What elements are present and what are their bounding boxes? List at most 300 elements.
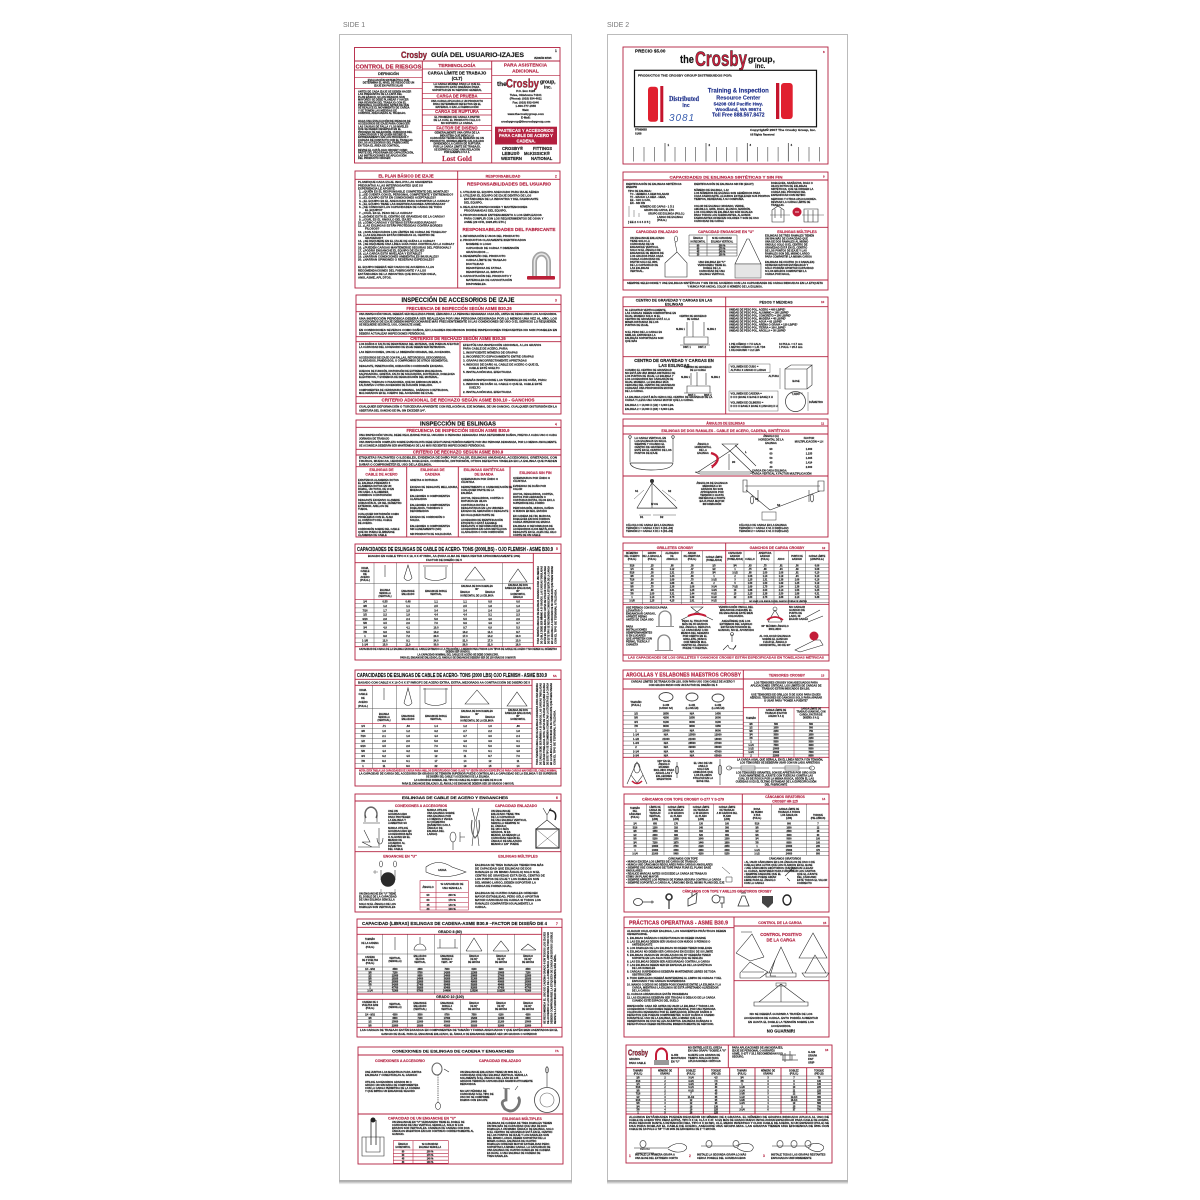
text: para aplicaciones: SEGURO. <box>732 1054 744 1058</box>
table: grilletes: 1.00 <box>650 594 655 596</box>
table: grapas: 360 <box>817 1097 822 1099</box>
table: cancamos con tope: VERTICAL <box>649 815 661 818</box>
box: distribuidor <box>634 70 816 127</box>
table: angulo: ÁNGULO <box>422 884 434 889</box>
footer note: SIEMPRE SELECCIONE Y USE ESLINGAS SINTÉTICAS Y SIN FIN DE ACUERDO CON LAS CAPACIDADES DE CARGA INDICADAS EN LA ETIQUETA <box>627 280 823 285</box>
table: tensores: 1-3/4 <box>748 751 754 754</box>
table: tons: 7/8 <box>363 630 367 634</box>
section: conexiones a accesorios: ACCESORIOS MÁS <box>388 831 412 836</box>
heading: multiples: ESLINGAS MÚLTIPLES <box>777 229 817 234</box>
column: cable de acero: ESLINGAS DE <box>369 468 394 472</box>
column: control de riesgos: LAS PREGUNTAS DE LA LISTA DEL <box>358 92 403 96</box>
table: tons: 9/16 <box>362 617 368 621</box>
table: tons: 1.7 <box>383 608 387 612</box>
column: sin fin: HOYOS, DESGARROS, CORTES, <box>513 492 554 496</box>
table: tons: 3.4 <box>463 608 467 612</box>
version: VERSIÓN 8/7/05 <box>534 57 552 60</box>
text: numero de eslinga: TIEMPOS, REFIÉRASE A SU COMPAÑÍA. <box>694 196 744 201</box>
footer note: LAS CARGAS DE TRABAJO ESTÁN BASADAS EN COMPONENTES DE TAMAÑO Y FORMA ADECUADOS Y QUE ESTÉN BIEN ASENTADOS EN EL <box>360 1027 558 1032</box>
page number: 9 <box>823 174 825 178</box>
table: grado 8: 95400 <box>444 987 451 990</box>
list: fabricante: 4. CAPACITACIÓN DEL PRODUCTO Y <box>460 273 512 278</box>
section: capacidad enlazado: MENOR A 120° PUEDE <box>491 842 519 846</box>
checklist: plan basico: 19. ¿NARRAN CONDICIONES AMBIENTALES INUSUALES? <box>358 255 439 259</box>
table: tons 5A: 2.4 <box>516 734 520 738</box>
table: grado 10: DE 30° <box>524 1006 532 1008</box>
table: grapas: 3 <box>664 1097 666 1099</box>
text: criterios derecha: EFECTÚE UNA INSPECCIÓN ADICIONAL A LAS GRAPAS <box>463 342 541 347</box>
table: grilletes: 1.25 <box>690 590 695 592</box>
table: tons: 11.4 <box>488 630 493 634</box>
text: verificacion <box>718 604 754 632</box>
table: grapas: (PULG.) <box>687 1074 696 1076</box>
section: eslingas multiples: CARGA. <box>475 905 487 909</box>
text: pernos roscados: SEMIPERMANENTES <box>626 630 652 634</box>
table: grado 8: DE GRÚAS <box>495 961 508 964</box>
table: tons: ESLINGA DE DOS <box>508 584 528 587</box>
table: tons 5A: HORIZONTAL <box>511 718 526 721</box>
table: grapas: 12 <box>793 1094 796 1096</box>
table: grado 8: 4900 <box>498 968 504 971</box>
heading <box>634 358 714 368</box>
text: dobleces: SINTÉTICAS, QUE SE DIRIGEN LA <box>771 186 813 191</box>
text: centro de gravedad: MISMA DISTANCIA DE LOS <box>625 320 659 324</box>
heading: plan basico: EL PLAN BÁSICO DE IZAJE <box>378 173 434 178</box>
page number: 4 <box>555 422 557 426</box>
table: tons: 16.0 <box>515 643 521 647</box>
table: tons: 1/2 <box>363 613 367 617</box>
column: control de riesgos: PLAN BÁSICO. SI LOS RIESGOS SON <box>358 94 405 99</box>
text: angulo horizontal <box>695 441 712 455</box>
heading: CONEXIONES A ACCESORIO <box>375 1059 425 1063</box>
text: carga vertical: ESTÉ EN EL CENTRO DE LOS <box>634 447 672 452</box>
table: ganchos: NO USAR LOS ÁNGULOS DEL GANCHO FUERA DE LÍMITES <box>749 600 807 603</box>
table: tensores: 10000 <box>773 748 780 750</box>
heading: capacidad enlazado: CAPACIDAD ENLAZADO <box>636 230 678 234</box>
heading: GRILLETES CROSBY <box>657 546 694 550</box>
table: ganchos: 1.13 <box>763 576 768 578</box>
table: cancamos con tope: 310 <box>674 827 679 829</box>
list: fabricante: CARGA LÍMITE DE TRABAJO <box>466 257 507 262</box>
text: angulo: 90° MÁXIMO ÁNGULO <box>761 623 789 628</box>
column: control de riesgos: QUE SE DEBEN OBSERVAR EN EL <box>358 127 402 131</box>
text: enlazado: PARTIR SOLO EL 80% <box>630 260 658 264</box>
table: tons 5A: 3/8 <box>361 729 365 733</box>
table: ganchos: .94 <box>779 568 783 571</box>
table: tons 5A: 6.2 <box>382 754 386 758</box>
text: calculo derecha: TENSIÓN 1 = CARGA X S1 X D2/(D1+D2) <box>739 525 789 530</box>
table: angulo: 45 <box>402 1158 405 1160</box>
table: cancamos con tope: DE TRABAJO <box>669 809 684 812</box>
table: ganchos: 7-1/2 <box>732 586 738 588</box>
text: enlazado: REDUCIDAS. <box>460 1082 476 1086</box>
text: numero de eslinga: CADA FABRICANTE. ALGUNOS ESTABLECEN SUS PROPIOS <box>694 194 770 198</box>
table: argollas: 47000 <box>714 749 722 753</box>
table: tons 5A: 6.1 <box>463 744 467 748</box>
column: terminologia: POR LA CARGA LÍMITE DE TRABAJO. <box>433 144 481 148</box>
column: sin fin: CORTE DE UN CABLE <box>513 533 541 537</box>
text: practicas: 10. MANOS O DEDOS NO DEBEN POSICIONARSE ENTRE LA ESLINGA Y LA <box>627 982 721 986</box>
table: tons 5A: 1.2 <box>406 729 410 733</box>
column: cadena: SIN PRODUCTO DE SOLDADURA <box>410 532 452 536</box>
table: cancamos con tope: DE TRABAJO <box>720 809 735 812</box>
table: grilletes: (PULG.) <box>648 559 657 561</box>
table: grado 8: DE DOS <box>416 959 425 961</box>
logo: crosby: Crosby <box>628 1048 648 1058</box>
text: tensores nota: DEL FABRICANTE <box>765 782 788 786</box>
text: multiples: SOPORTAN LA MISMA CARGA. LA CAPACIDAD DE <box>487 1145 551 1149</box>
text: enganche U: VERDADERA TIENE EL <box>698 263 727 267</box>
column: control de riesgos: IZAJE EN PARTICULAR <box>374 83 403 87</box>
diagram: centro de gravedad: DE CARGA <box>687 318 699 321</box>
sidebar: nota: DE CABLE DEBE SER MÍNIMO A 30 GRADOS. LAS CARGAS TABULADAS <box>540 566 544 644</box>
text: pesos: UNIDAD DE PESO POL. ACERO = 490 LB/PIE³ <box>729 308 785 312</box>
table: argollas: (LLAVE EN) <box>712 707 725 710</box>
column: control de riesgos: PERSONAL CALIFICADO ANTES DE QUE <box>358 103 409 107</box>
table: tons 5A: 3.9 <box>516 744 520 748</box>
text: conexiones: Y QUE IMPIDA UN ENGANCHE SEGURO <box>365 1089 415 1093</box>
table: angulo: 30 <box>697 254 700 256</box>
table: grado 10: 8800 <box>525 1018 531 1020</box>
table: ganchos: .88 <box>763 569 767 571</box>
text: criterios izquierda: COMPONENTES DE CERRADURA ORIGINAL, DAÑADOS O RETIRADOS, <box>359 387 449 392</box>
checklist: plan basico: EXPERIENCIA LE APORTE <box>358 186 395 190</box>
table: grapas: 4 <box>767 1102 769 1105</box>
table: grapas: 7/8 <box>740 1081 744 1083</box>
icon: fist grip clip <box>780 1051 798 1062</box>
table: cancamos con tope: CARGA LÍMITE <box>719 806 736 809</box>
section: enganche en U: UN ENGANCHE EN "U" TIENE <box>359 892 396 896</box>
icon: basket hitch over load <box>735 239 761 278</box>
text: tensores: LOS TENSORES CROSBY SON ADECUADOS PARA <box>754 680 818 684</box>
decoration: red stripes <box>648 83 793 122</box>
text: g-429 <box>808 1050 817 1064</box>
text: carga tension <box>752 468 812 476</box>
callout: pastecas y accesorios: CADENA. <box>516 138 536 143</box>
title: GUÍA DEL USUARIO-IZAJES <box>431 50 525 59</box>
table: grilletes: 8-1/2 <box>711 597 717 599</box>
caption step 1 <box>629 1152 678 1160</box>
table: tons 5A: 1.6 <box>382 729 386 733</box>
text: criterio <box>359 454 557 466</box>
text: notas tope <box>626 858 725 884</box>
text: angulo: FIJAR EL ÁNGULO <box>763 639 787 644</box>
text: 120: MAESTROS <box>657 777 672 781</box>
table: grapas: 225 <box>714 1110 719 1112</box>
table: tons 5A: 8.3 <box>382 759 386 763</box>
footer note <box>359 648 557 660</box>
table: cancamos con tope: 130 <box>699 824 704 826</box>
column: para asistencia: P.O. Box 3128 <box>516 89 536 93</box>
text: criterios izquierda: ACCESORIOS DE IZAJE CON FALLAS, RETORCIDOS, DESCORRIDOS, <box>359 356 447 360</box>
table: cancamos con tope: (PULG.) <box>631 817 640 819</box>
table: tons: 30.0 <box>433 643 439 647</box>
table: grilletes: 7/8 <box>630 594 634 596</box>
table: tons: 2.4 <box>488 608 492 612</box>
column: control de riesgos: CAPACITADOR Y DE QUIEN RECIBE EL <box>358 132 407 136</box>
table: tons 5A: 12 <box>435 754 438 758</box>
table: angulo: ÁNGULO <box>693 237 703 240</box>
text: no se deben guarnir: NO GUARNIR! <box>767 1028 795 1034</box>
text: centro de gravedad: SIMILAR, ENTONCES LA <box>625 333 656 337</box>
text: enganche U: UNA ESLINGA EN "U" <box>698 260 726 264</box>
text: notas tope: ÁNGULARES <box>626 868 643 872</box>
text: criterio: DAÑAR O COMPROMETER EL USO DE LA ESLINGA. <box>359 462 432 466</box>
table: tons: 12.0 <box>382 638 388 642</box>
table: factor <box>758 433 823 469</box>
table: cancamos giratorios: CARGA LÍMITE DE <box>779 808 800 811</box>
icon: shackle with angle <box>681 607 713 620</box>
table: grapas: 19 <box>793 1103 796 1105</box>
text: tensores: AÉREOS. TENSORES DE GANCHOS SOLO PARA APARAR <box>750 694 822 700</box>
table: ganchos: 1.69 <box>779 583 784 585</box>
text: identificacion: (PULG.) <box>657 218 667 222</box>
column: terminologia: MATERIAL O EN LA FABRICACIÓN <box>435 104 479 109</box>
section: conexiones a accesorios: PARA PROTEGER <box>388 815 410 819</box>
table: cancamos con tope: 2120 <box>698 846 704 848</box>
table: tons: 0.55 <box>382 600 388 604</box>
text: training center: Training & Inspection <box>708 88 769 94</box>
table: tons: CABLE <box>361 569 370 573</box>
table: grado 8: 25600 <box>498 979 505 981</box>
panel 2: plan basico y responsabilidad <box>355 171 560 288</box>
icon: sling wear and stop sign <box>770 206 824 222</box>
section: eslingas multiples: ESLINGAS MÚLTIPLES <box>498 854 538 858</box>
table: grado 10: DE GRÚAS <box>495 1008 508 1011</box>
text: angulo horizontal: HORIZONTAL <box>695 445 712 449</box>
table: tensores: 500 <box>809 724 814 726</box>
table: grilletes: 1/2 <box>712 569 716 571</box>
text: criterios derecha: 2. INSTALACIÓN MAL EFECTUADA <box>463 389 512 394</box>
table: tons: 2.9 <box>516 617 520 621</box>
table: argollas: 2-3/4 <box>633 754 640 758</box>
table: cancamos con tope: 1200 <box>652 827 658 829</box>
table: cancamos giratorios: 3/8 <box>755 827 759 829</box>
table: grilletes: 1-1/2 <box>711 580 717 582</box>
column: terminologia: (CLT) <box>452 76 463 81</box>
table: tons: 60° <box>516 591 520 593</box>
table: grado 10: 12000 <box>417 1022 424 1024</box>
table: tons 5A: .71 <box>382 724 386 728</box>
page number: 3 <box>555 298 557 302</box>
logo: the crosby group inc: Crosby <box>695 48 747 71</box>
list: usuario: PARA CUMPLIR CON LOS REQUERIMIENTOS DE OSHA Y <box>464 216 544 220</box>
icon: coil with sling <box>373 861 396 892</box>
table: factor: ESLINGA <box>765 441 777 445</box>
list: usuario: ESTÁNDARES DE LA INDUSTRIA Y DEL FABRICANTE <box>464 196 538 201</box>
text: enganche U <box>698 260 727 276</box>
text: multiples: RAMALES SON DEL MISMO LARGO <box>765 252 810 256</box>
column: para asistencia: ADICIONAL <box>512 69 539 75</box>
table: grilletes: 3/4 <box>712 572 716 574</box>
column: para asistencia: 1-800-777-1555 <box>515 104 536 108</box>
table: grilletes: 1.88 <box>670 583 675 585</box>
table: grado 8: 1-1/4 <box>367 990 373 993</box>
table: grado 8: 6100 <box>471 969 477 971</box>
text: criterios izquierda: LA CAPACIDAD DEL ACCESORIO DE IZAJE DEBEN SER RETIRADOS. <box>359 345 446 349</box>
table: tensores: 3000 <box>773 734 779 736</box>
column: cadena: DEFORMADOS <box>410 509 429 513</box>
table: tons: 7.0 <box>434 621 438 625</box>
text: practicas: ACCESORIOS Y FIJACIONES DEBEN REVISARSE, POR UNA PERSONA <box>627 1007 716 1011</box>
table: grado 10: 8800 <box>392 1018 398 1020</box>
table: grapas: 45 <box>715 1089 718 1092</box>
heading: CENTRO DE GRAVEDAD Y CARGAS EN <box>634 358 714 363</box>
heading: enganche U: CAPACIDAD ENGANCHE EN "U" <box>698 230 754 234</box>
list: fabricante: GRAFICADOS ... <box>466 250 489 254</box>
logo: the crosby group: Crosby <box>506 76 539 90</box>
table: cancamos con tope: CARGA LÍMITE <box>693 806 710 809</box>
checklist: plan basico: 13. ¿LAS ESLINGAS ESTÁN DIRIGIDAS AL CENTRO DE <box>358 232 435 237</box>
table: grado 8: 10000 <box>498 972 505 974</box>
column: sinteticas de banda: ESLINGA <box>461 491 473 495</box>
table: cancamos con tope: CARGA DE <box>649 809 662 812</box>
table: grado 10: 7100 <box>417 1018 423 1020</box>
table: grado 8: 67400 <box>498 987 505 990</box>
table: angulo: ÁNGULO <box>398 1143 408 1146</box>
heading: DE LA CARGA <box>767 938 795 942</box>
table: grado 8: 28300 <box>525 982 532 984</box>
panel 16: grapas para cable <box>626 1045 832 1163</box>
text: centro de gravedad <box>625 308 676 343</box>
footer note: GANCHO DE IZAJE. PARA EL ENGANCHE ENLAZADO, EL ÁNGULO DE ENGANCHE DEBERÁ SER 135 GRADOS O SUPERIOR <box>381 1031 537 1036</box>
table: cancamos con tope: (LBS) <box>673 819 679 821</box>
column: cadena: MUESCAS <box>410 488 423 492</box>
text: angulos de eslingas: APROBADOS POR <box>700 490 724 494</box>
text: criterios izquierda: ELÉCTRICOS, Y EVIDENCIA DE DEGRADACIÓN DEL MATERIAL. <box>359 374 439 379</box>
text: practicas: SOPORTE EN LAS ASAS PARA EVITAR QUE SE DESLIZA <box>632 956 703 960</box>
label: side 2: SIDE 2 <box>607 22 629 29</box>
section: eslingas multiples: DE CAPACIDAD QUE ESLINGAS DE DOS <box>475 866 532 870</box>
table: ganchos: 0.19 <box>815 583 820 585</box>
text: pesos: 1 KILOGRAMO = 2.2 LBS <box>729 348 760 352</box>
column: cable de acero: EXISTENCIA ALAMBRES ROTOS <box>358 478 399 482</box>
table: grilletes: 2 <box>713 583 715 585</box>
table: cancamos con tope: AL PLANO <box>670 815 682 818</box>
text: notas giratorios: • USE CÁNCAMOS GIRATORIOS QUE PUEDAN LLEGAR <box>744 865 813 870</box>
text: multiples: GRAVEDAD ESTÁ EN EL CENTRO <box>765 244 807 250</box>
table: ganchos: .75 <box>763 566 767 568</box>
column: control de riesgos: HAGA UNA EVALUACIÓN DE RIESGOS DE <box>358 118 411 123</box>
table: grado 8: 17000 <box>498 976 505 978</box>
table: grado 10: VERTICAL <box>441 1008 453 1011</box>
text: notas giratorios: DEL CÁNCAMO <box>797 874 816 879</box>
text: multiples: UNA DE DOS RAMALES AL MISMO <box>765 240 808 244</box>
text: practicas: 3. LOS RAMALES DE LAS ESLINGAS NO DEBEN TENER DOBLECES <box>627 946 712 950</box>
text: multiples: ÁNGULO SOLO SI EL CENTRO DE <box>765 242 808 246</box>
table: angulo: 140 % <box>448 903 456 907</box>
column: terminologia: SE EXPRESA COMO UNA RELACIÓN <box>434 146 480 151</box>
table: grapas: 3-3/4 <box>688 1080 694 1083</box>
icon: cube: BASE <box>792 379 800 383</box>
caption step 1: 1 <box>629 1154 631 1158</box>
table: ganchos: (PULG.) <box>761 559 770 561</box>
text: multiples: TRES RAMALES. <box>487 1154 508 1158</box>
column: sin fin: PERFORACIÓN, NUDOS, DAÑOS <box>513 505 554 510</box>
table: grado 8: 72300 <box>392 991 399 993</box>
text: calculo izquierda: TENSIÓN 2 = CARGA X D1 / S (D1+D2) <box>626 528 673 533</box>
table: grapas: 12-1/4 <box>791 1096 798 1099</box>
copyright: Copyright© 2007 The Crosby Group, Inc. <box>750 128 816 132</box>
table: tons: 17.3 <box>462 634 468 638</box>
table: grapas: (PIE-LB) <box>711 1074 721 1076</box>
table: cancamos con tope: 1870 <box>673 842 679 844</box>
column: control de riesgos: MAYORES SE DEBE PLANEAR Y HACER <box>358 98 409 102</box>
table: argollas: 39000 <box>688 745 696 749</box>
table: tons 5A: HORIZONTAL DE LA ESLINGA <box>460 720 494 722</box>
table: ganchos: 1.06 <box>779 572 784 574</box>
section: conexiones a accesorios: UNA ESLINGA SOBRE <box>427 811 455 815</box>
table: tons: 3/8 <box>363 604 367 608</box>
column: sinteticas de banda: ALARGADOS O CON CORROSIÓN <box>461 529 504 534</box>
table: tons 5A: 11 <box>517 759 520 763</box>
table: tensores: 15000 <box>773 752 780 754</box>
callout: volumen de cilindro: D X D X BASE X BASE X (ANCHO) X H <box>730 404 778 408</box>
table: argollas: 3100 <box>715 720 721 724</box>
text: pernos roscados <box>626 606 667 646</box>
diagram: installation steps <box>634 1140 824 1153</box>
text: enlazado: UN ENGANCHE ENLAZADO TIENE UN 80% DE LA <box>460 1070 522 1074</box>
table: grado 8: ENGANCHE <box>440 955 454 958</box>
section: capacidad enlazado: DE 135 O MÁS <box>491 826 509 831</box>
table: argollas: G-341 <box>689 704 696 707</box>
table: ganchos: 2.75 <box>763 597 768 599</box>
checklist: plan basico: PLANIFIQUE CADA IZAJE. INCLUYA LAS SIGUIENTES <box>358 180 433 184</box>
table: grado 10: DE GRÚAS <box>522 1008 535 1011</box>
icon: bent sling over load: CARGA <box>438 869 447 872</box>
illustrations: chain sling types <box>395 937 536 951</box>
text: criterios izquierda: DESGASTE, PENETRACIÓN, OXIDACIÓN O CORROSIÓN EXCESIVA. <box>359 363 444 368</box>
table: tons: ENGANCHE DOBLE <box>425 590 447 593</box>
diagram: angulo <box>695 444 756 474</box>
table: ganchos: 1.25 <box>748 580 753 582</box>
table: cancamos con tope: 7200 <box>652 842 658 844</box>
text: para angulos: CENTRO EL ÁNGULO <box>682 642 708 647</box>
table: tons 5A: 8.7 <box>488 754 492 758</box>
column: para asistencia: Fax: (918) 832-0940 <box>512 100 539 104</box>
text: centro de gravedad 2: LOS ACCESORIOS NO CARGARÁN DE <box>625 376 673 381</box>
table: grapas: 37 <box>793 1110 796 1112</box>
text: frecuencia: JORNADA DE TRABAJO <box>359 436 389 440</box>
sidebar: nota: ESTÁN EN TONELADAS. NOTA: ANTES DE UTILIZAR CUALQUIER ESLINGA <box>543 683 546 765</box>
text: carga axial: LA CARGA AXIAL QUE SEÑALA, EN EL LÍNEA RECTA Y EN TENSIÓN, <box>737 756 823 762</box>
checklist: plan basico: 10. ¿CÓMO CARGAS Y ESTIBAS ESTÁN ASEGURADAS? <box>358 220 437 224</box>
text: angulos de eslingas: ÁNGULOS DE ESLINGAS <box>696 480 728 485</box>
text: practicas: INSPECCIÓN: CADA DÍA ANTES DE USAR LA ESLINGA Y TODOS LOS <box>627 1003 714 1008</box>
text: para angulos: MENOS DEL SESENTA <box>681 631 709 635</box>
panel 9: capacidades sinteticas <box>623 172 828 290</box>
table: tensores: 1000 <box>808 734 814 736</box>
table: grilletes: GRUPO <box>648 553 656 555</box>
table: grilletes: .50 <box>650 580 654 582</box>
table: grapas: GRAPAS <box>660 1072 670 1076</box>
table: argollas <box>623 692 743 758</box>
logo: distributor: Distributed <box>669 95 699 103</box>
list: fabricante: DUCTILIDAD <box>466 262 484 266</box>
sidebar: nota: EN LA ESLINGA LA CAPACIDAD DE SU FABRICANTE QUE PUEDE VARIAR <box>550 683 553 765</box>
table: tons 5A: 9/16 <box>360 744 366 748</box>
column: sinteticas de banda: DESGASTADAS EN LAS UNIONES <box>461 506 504 510</box>
text: frecuencia <box>359 311 557 336</box>
table: grado 10: 4300 <box>525 1014 531 1016</box>
table: grapas: 18-1/4 <box>791 1099 798 1102</box>
text: practicas: OBSTRUCCIÓN <box>632 972 651 976</box>
table: grapas: 7/8 <box>636 1110 640 1112</box>
table: tensores: 7500 <box>773 745 779 747</box>
table: tons: 1.1 <box>406 604 410 608</box>
text: tensores <box>750 680 822 702</box>
sidebar: nota <box>536 683 556 765</box>
